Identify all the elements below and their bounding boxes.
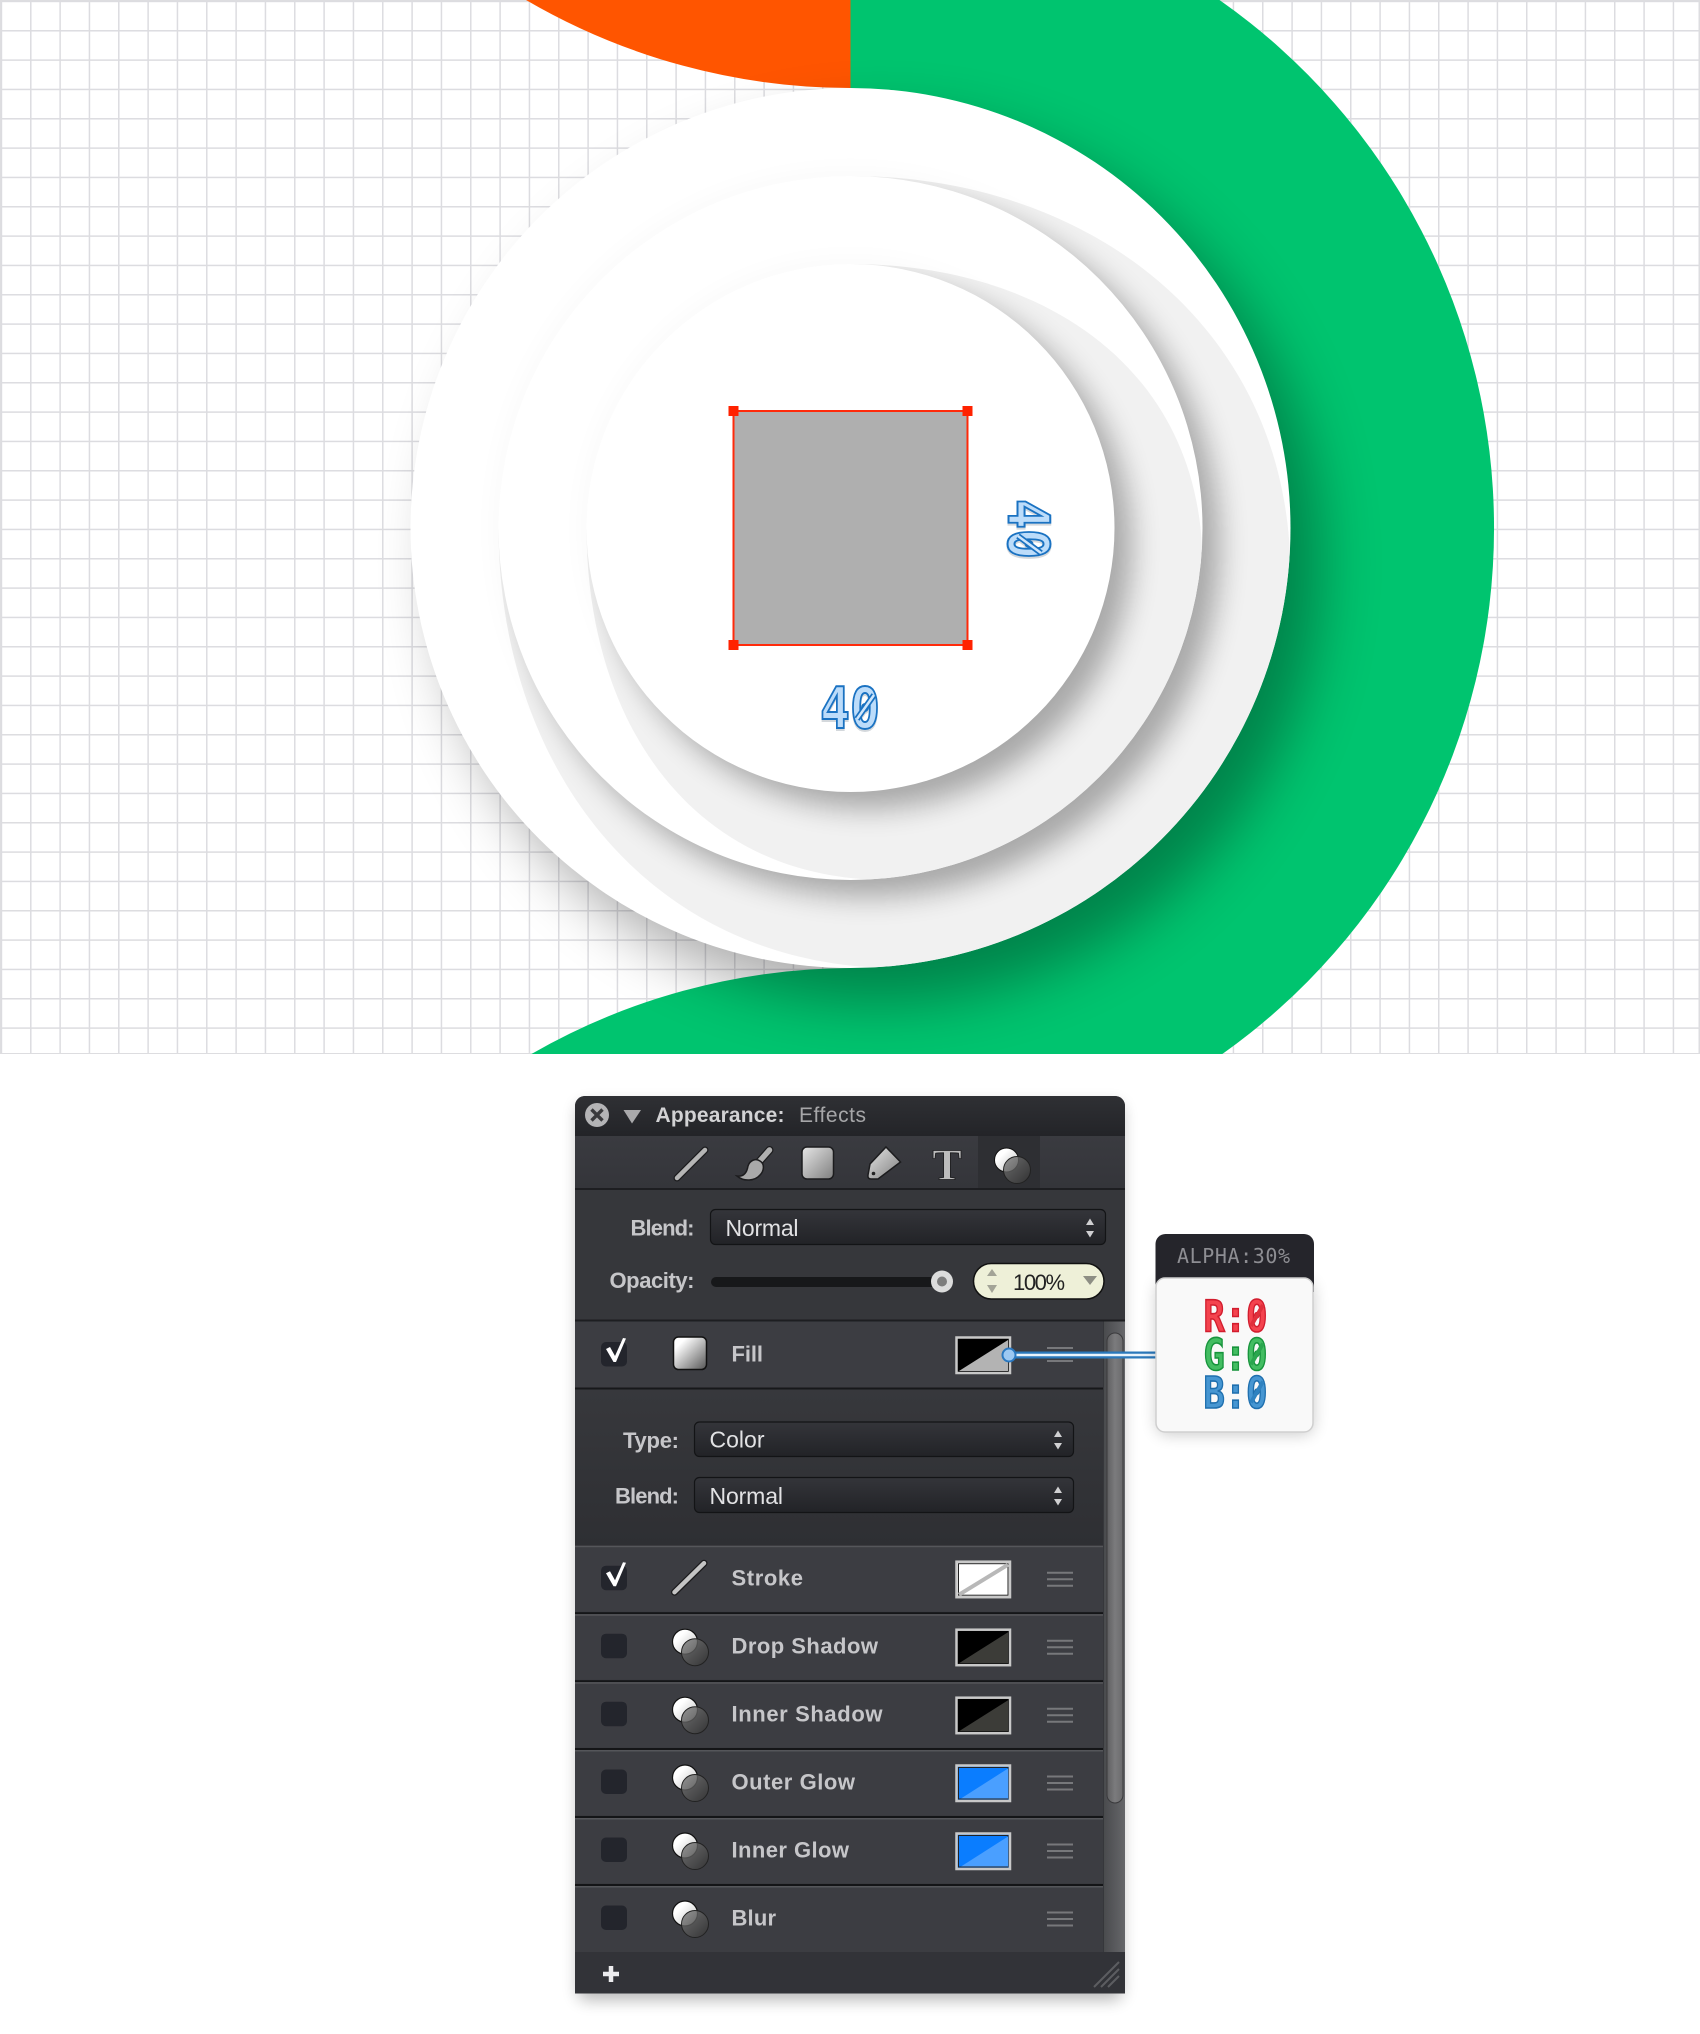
selected tab (978, 1136, 1040, 1188)
opacity control: 100% (1013, 1270, 1065, 1295)
drop shadow row (575, 1612, 1103, 1680)
fill row (575, 1320, 1125, 1390)
panel shadow (578, 1104, 1122, 2000)
panel header (575, 1096, 1125, 1136)
green lower-left arc (528, 968, 850, 1056)
panel body (575, 1096, 1125, 1994)
blend control: Normal (710, 1483, 783, 1509)
disclosure triangle (624, 1110, 641, 1124)
red value: R:0 (1204, 1292, 1268, 1342)
type control: Type: (623, 1428, 679, 1453)
blur row (575, 1884, 1103, 1952)
outer glow row: Outer Glow (732, 1770, 856, 1794)
outer white circle (410, 88, 1290, 968)
blend control: Blend: (630, 1216, 694, 1240)
orange arc (526, 0, 850, 88)
outer crescent (499, 176, 1290, 968)
faint halo around middle circle (496, 173, 1206, 883)
faint halo around inner circle (584, 261, 1118, 795)
gray square with selection (728, 406, 972, 650)
icon: line (677, 1150, 705, 1178)
blur row: Blur (732, 1906, 776, 1930)
colour values callout (1156, 1234, 1314, 1434)
blend control: Blend: (615, 1484, 679, 1508)
appearance panel (575, 1096, 1125, 2000)
dimension label: width 40: 40 (820, 676, 880, 742)
grid background (0, 0, 1700, 1054)
blend control: Normal (726, 1215, 798, 1241)
blend control (615, 1478, 1074, 1512)
opacity control (610, 1264, 1104, 1299)
type control (623, 1422, 1074, 1456)
callout card (1156, 1278, 1313, 1432)
header subtitle: Effects (799, 1104, 866, 1127)
green right arc (850, 0, 1494, 1056)
dimension label: height 40: 40 (994, 499, 1060, 559)
blend control (630, 1210, 1106, 1244)
blue value: B:0 (1204, 1368, 1268, 1419)
add button (603, 1966, 619, 1982)
inner white circle (586, 264, 1114, 792)
connector line (1002, 1348, 1156, 1362)
icon: square (802, 1147, 834, 1179)
inner shadow row: Inner Shadow (732, 1702, 883, 1727)
icon: text tool: T (932, 1140, 962, 1190)
middle white circle (498, 176, 1202, 880)
inner glow row: Inner Glow (732, 1838, 850, 1862)
header title: Appearance: (656, 1104, 784, 1127)
toolbar (575, 1136, 1125, 1190)
fill settings section (575, 1390, 1103, 1546)
middle crescent (586, 264, 1202, 880)
inner glow row (575, 1816, 1103, 1884)
panel footer (575, 1952, 1125, 1994)
callout shadow (1157, 1282, 1313, 1434)
outer circle shadow (440, 122, 1320, 1002)
scrollbar (1104, 1322, 1125, 1952)
opacity control: Opacity: (610, 1268, 694, 1293)
icon: effects (994, 1148, 1030, 1184)
inner shadow row (575, 1680, 1103, 1748)
drop shadow row: Drop Shadow (732, 1634, 879, 1659)
icon: brush (737, 1150, 770, 1180)
close button (585, 1103, 609, 1127)
callout header (1156, 1234, 1314, 1292)
type control: Color (710, 1426, 765, 1452)
green value: G:0 (1204, 1330, 1268, 1381)
outer glow row (575, 1748, 1103, 1816)
resize handle (1094, 1962, 1119, 1987)
alpha label: ALPHA:30% (1177, 1244, 1290, 1268)
fill row: Fill (732, 1342, 763, 1366)
stroke row (575, 1546, 1103, 1612)
stroke row: Stroke (732, 1566, 803, 1591)
icon: tag (868, 1147, 900, 1179)
illustration: grid and layered circles (0, 0, 1700, 1056)
